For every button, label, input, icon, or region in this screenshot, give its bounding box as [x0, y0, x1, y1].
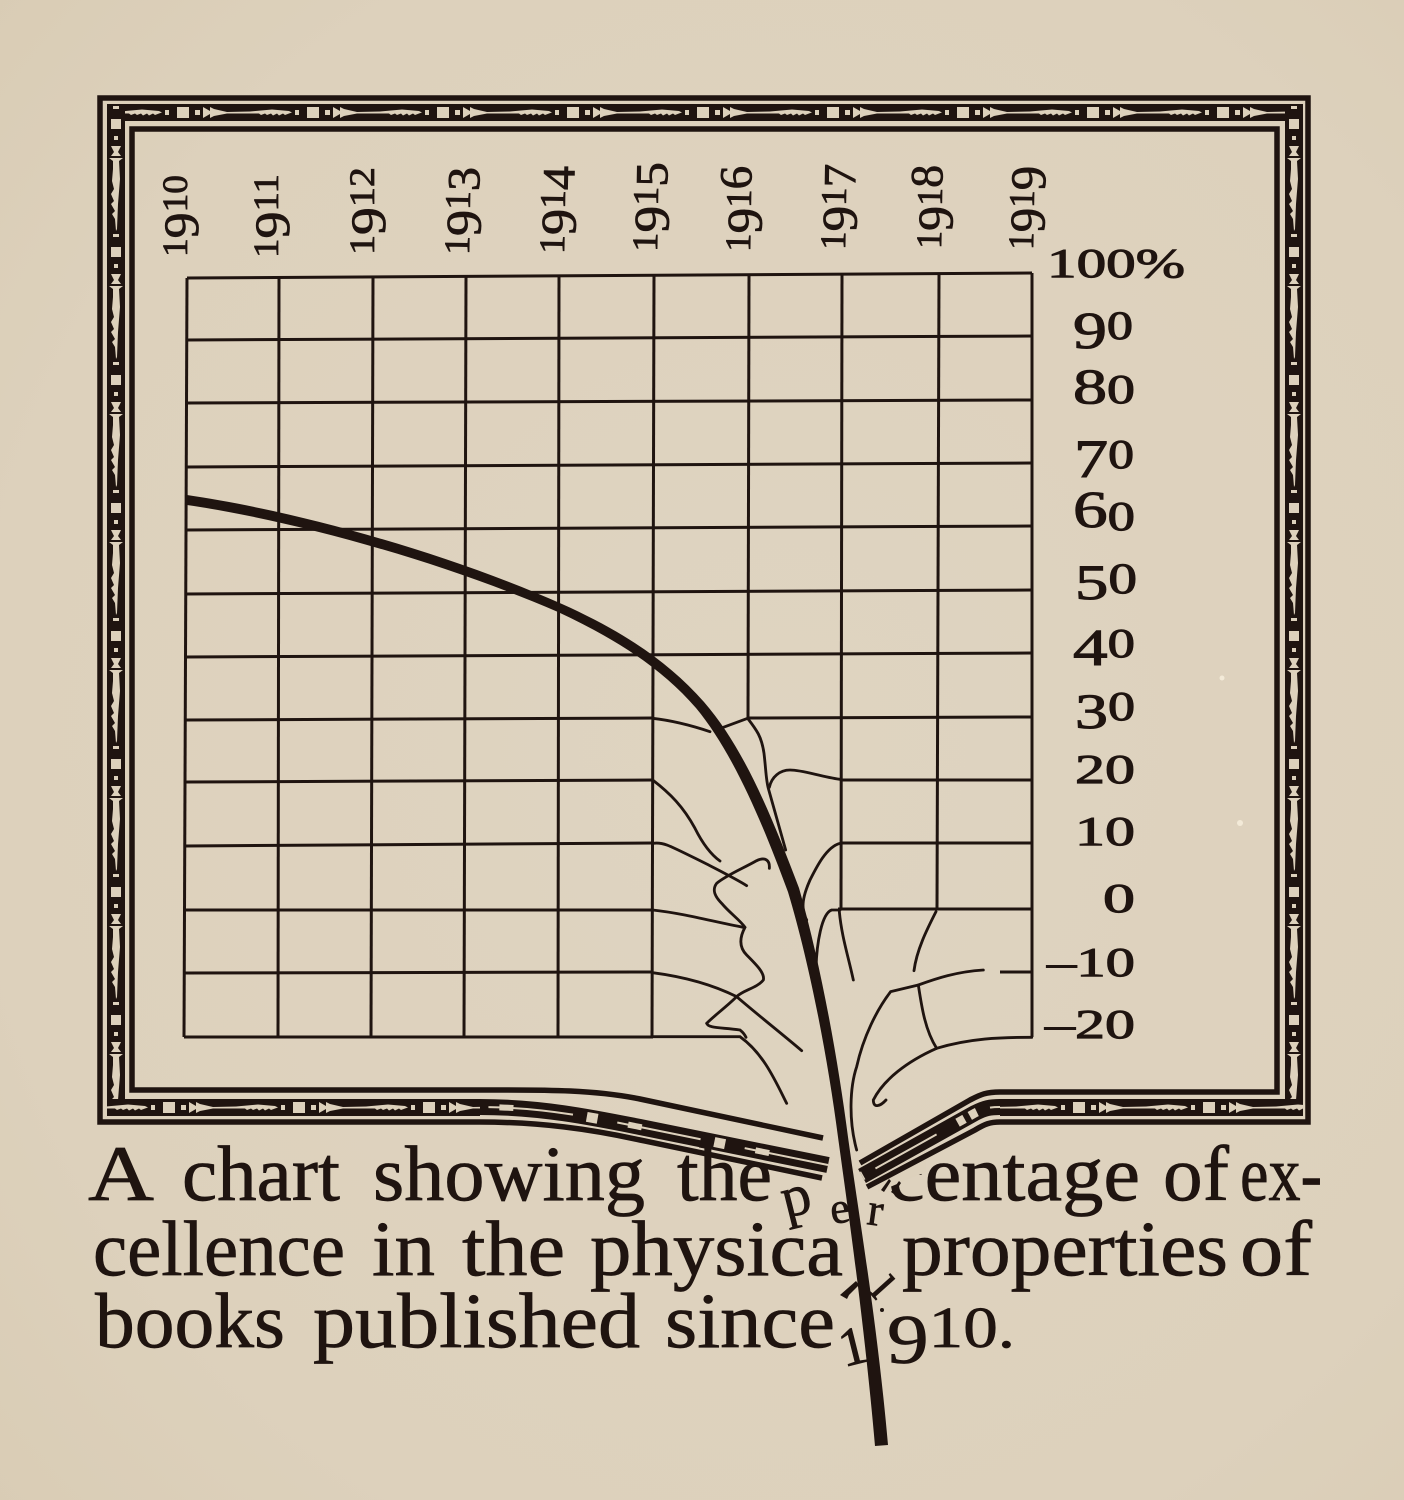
percentage scale labels: 9 — [1073, 303, 1107, 360]
caption text: published — [313, 1277, 640, 1364]
percentage scale labels: 0 — [1103, 875, 1135, 921]
main declining curve — [187, 495, 888, 1446]
year labels: 1 — [342, 187, 382, 207]
year labels: 9 — [435, 209, 492, 237]
year labels: 1 — [719, 189, 759, 208]
caption text: showing — [373, 1130, 645, 1217]
year labels: 1 — [910, 187, 950, 206]
caption text: r — [865, 1183, 887, 1236]
caption text: the — [462, 1205, 565, 1292]
year labels: 1 — [246, 175, 286, 193]
percentage scale labels: 3 — [1075, 683, 1108, 739]
year labels: 9 — [623, 205, 680, 233]
year labels: 1 — [718, 233, 758, 252]
year labels: 1 — [155, 194, 195, 212]
caption text: l — [862, 1268, 903, 1306]
year labels: 1 — [532, 235, 572, 254]
caption text: chart — [182, 1130, 340, 1217]
year labels: 1 — [625, 233, 665, 252]
percentage scale labels: –20 — [1044, 1001, 1135, 1047]
year labels: 4 — [533, 165, 585, 190]
year labels: 9 — [1000, 165, 1056, 191]
percentage scale labels — [1044, 240, 1185, 1047]
fragments of the broken letters l and c — [840, 1179, 901, 1312]
caption text: of — [1163, 1130, 1229, 1217]
caption text: physica — [590, 1205, 843, 1292]
caption text: in — [372, 1205, 435, 1292]
year labels: 9 — [999, 207, 1056, 233]
percentage scale labels: 0 — [1108, 620, 1135, 666]
year labels: 7 — [814, 163, 865, 188]
caption text: p — [773, 1161, 817, 1231]
year labels: 1 — [246, 240, 286, 258]
caption text: books — [95, 1277, 285, 1364]
year labels: 2 — [342, 169, 382, 187]
year labels — [153, 161, 1056, 258]
caption text: 1 — [929, 1295, 963, 1360]
caption text: of — [1240, 1205, 1312, 1292]
percentage scale labels: 100% — [1047, 240, 1185, 286]
ornamental border frame — [100, 98, 1308, 1187]
year labels: 8 — [901, 164, 952, 188]
percentage scale labels: 20 — [1075, 746, 1135, 792]
percentage scale labels: 0 — [1107, 303, 1133, 348]
percentage scale labels: 7 — [1074, 429, 1108, 489]
percentage scale labels: 0 — [1108, 556, 1137, 603]
year labels: 1 — [342, 237, 382, 255]
year labels: 1 — [533, 190, 573, 209]
year labels: 9 — [907, 205, 964, 231]
percentage scale labels: 6 — [1073, 482, 1108, 539]
caption text: ex- — [1240, 1130, 1322, 1217]
year labels: 5 — [626, 161, 678, 187]
year labels: 9 — [716, 207, 773, 234]
caption text: 9 — [887, 1302, 929, 1379]
paper specks — [1220, 676, 1243, 826]
caption text: 0. — [963, 1295, 1007, 1360]
percentage scale labels: 4 — [1073, 620, 1108, 677]
caption text: cellence — [93, 1205, 345, 1292]
caption text: e — [827, 1183, 853, 1234]
year labels: 9 — [811, 205, 868, 232]
percentage scale labels: –10 — [1046, 939, 1135, 985]
caption text: 1 — [832, 1314, 873, 1379]
percentage scale labels: 0 — [1108, 431, 1134, 477]
broken grid lines — [653, 718, 1032, 1150]
paper gap erasing the top of the broken letter c — [878, 1150, 926, 1192]
year labels: 1 — [1001, 231, 1041, 250]
year labels: 9 — [530, 208, 587, 236]
year labels: 6 — [710, 165, 761, 190]
year labels: 1 — [155, 239, 195, 257]
percentage scale labels: 5 — [1075, 554, 1108, 610]
year labels: 1 — [814, 187, 854, 206]
percentage scale labels: 80 — [1073, 358, 1135, 414]
year labels: 3 — [438, 166, 490, 191]
caption text — [88, 1130, 1322, 1379]
caption text: properties — [902, 1205, 1228, 1292]
percentage scale labels: 10 — [1075, 808, 1135, 854]
caption text: the — [677, 1130, 772, 1217]
year labels: 1 — [1002, 190, 1042, 208]
percentage scale labels: 0 — [1108, 493, 1135, 539]
caption text: since — [665, 1277, 835, 1364]
year labels: 9 — [153, 212, 209, 238]
year labels: 9 — [244, 211, 300, 239]
year labels: 1 — [813, 231, 853, 250]
year labels: 0 — [155, 176, 195, 194]
year labels: 1 — [438, 191, 478, 210]
percentage scale labels: 0 — [1108, 683, 1135, 729]
year labels: 9 — [340, 207, 396, 235]
year labels: 1 — [909, 230, 949, 249]
caption text: A — [88, 1130, 154, 1217]
year labels: 1 — [246, 193, 286, 211]
year labels: 1 — [626, 186, 666, 206]
caption text: centage — [888, 1130, 1140, 1217]
grid — [184, 273, 1032, 1037]
year labels: 1 — [437, 236, 477, 255]
